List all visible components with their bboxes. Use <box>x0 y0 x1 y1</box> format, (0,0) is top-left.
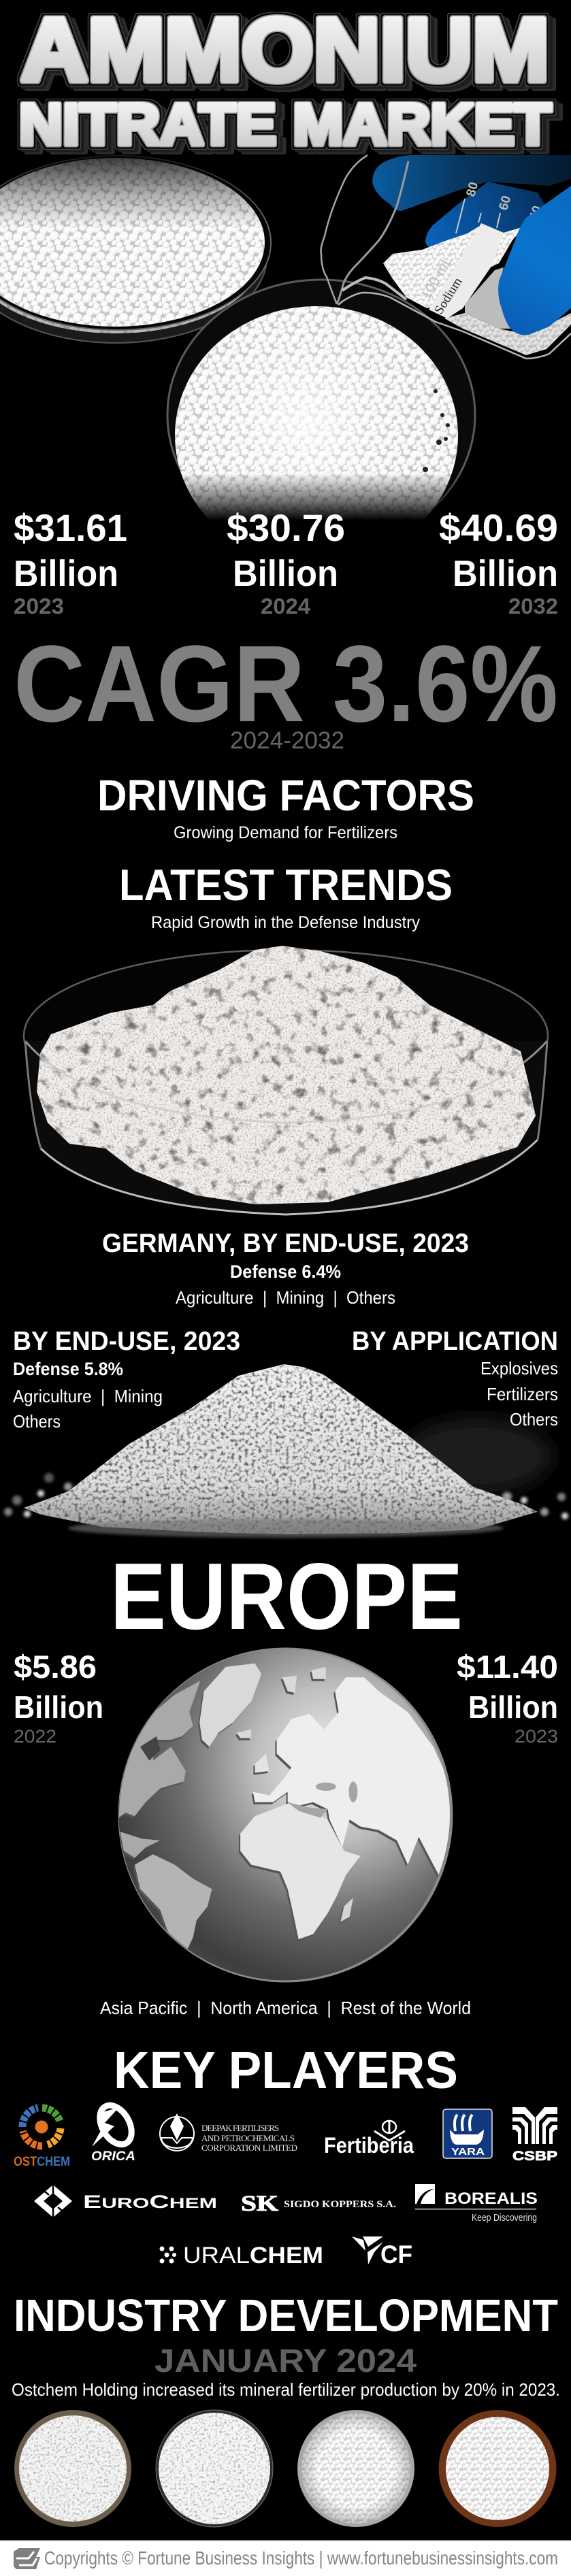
prills at beaker base <box>444 313 571 355</box>
logo: Sigdo Koppers: SIGDO KOPPERS S.A. <box>284 2199 396 2210</box>
by application panel <box>352 1327 558 1430</box>
market size: 2024 <box>227 506 345 618</box>
beaker glass outline <box>321 155 368 304</box>
by application panel: Explosives <box>480 1358 558 1378</box>
logo: EuroChem <box>34 2185 217 2217</box>
market size: 2032: Billion <box>453 553 558 594</box>
logo: Sigdo Koppers <box>241 2192 396 2216</box>
logo: EuroChem: E URO C HEM <box>83 2192 217 2212</box>
Europe value 2023 <box>457 1649 558 1747</box>
beaker label strip <box>429 223 504 318</box>
front glove thumb <box>498 186 571 335</box>
development date: JANUARY 2024 <box>154 2343 417 2379</box>
globe <box>118 1648 455 1983</box>
bowl 4 <box>438 2410 557 2527</box>
region heading: Europe: EUROPE <box>110 1544 463 1649</box>
by application panel: Fertilizers <box>487 1384 558 1404</box>
by application panel: BY APPLICATION <box>352 1327 558 1356</box>
latest trends text: Rapid Growth in the Defense Industry <box>151 913 420 932</box>
Europe value 2023: $11.40 <box>457 1649 558 1685</box>
bowl 2 <box>156 2410 273 2527</box>
beaker with blue glove <box>321 155 571 359</box>
Europe value 2023: 2023 <box>515 1726 558 1747</box>
beaker graduation 40: 40 <box>527 204 545 222</box>
Germany heading: GERMANY, BY END-USE, 2023 <box>102 1229 469 1258</box>
market size: 2024: $30.76 <box>227 506 345 549</box>
dish front rim <box>25 1041 547 1123</box>
Europe value 2022: 2022 <box>14 1726 56 1747</box>
logo: Deepak Fertilisers: AND PETROCHEMICALS <box>201 2133 295 2143</box>
fade to black below dish <box>157 473 490 572</box>
bowls of prills <box>14 2410 557 2527</box>
heading: latest trends: LATEST TRENDS <box>119 860 453 910</box>
beaker graduation 60: 60 <box>497 194 514 212</box>
logo: Fertiberia: Fertiberia <box>324 2133 414 2158</box>
logo: CF: CF <box>380 2241 412 2268</box>
market size: 2023 <box>14 506 127 618</box>
logo: Borealis: Keep Discovering <box>472 2212 537 2224</box>
logo: Fertiberia <box>324 2121 414 2158</box>
logo: Yara: YARA <box>451 2146 485 2158</box>
by end-use panel: Agriculture | Mining <box>13 1386 163 1406</box>
market size: 2032 <box>439 506 558 618</box>
photo: petri dish of white powder <box>24 946 548 1215</box>
beaker graduation 80: 80 <box>464 180 481 198</box>
logo: Borealis: BOREALIS <box>444 2190 538 2208</box>
Europe value 2022: Billion <box>14 1689 103 1725</box>
footer logo <box>14 2548 40 2569</box>
logo: Orica: ORICA <box>91 2149 135 2164</box>
market size: 2023: $31.61 <box>14 506 127 549</box>
upper left petri dish <box>0 154 272 343</box>
background glow <box>402 1419 551 1493</box>
photo: salt-like crystal pile <box>4 1364 568 1538</box>
heading: driving factors: DRIVING FACTORS <box>97 771 474 820</box>
title line 1: AMMONIUM: AMMONIUM <box>21 0 549 99</box>
bowl 3 <box>297 2410 414 2527</box>
logos <box>14 2100 557 2268</box>
other regions list: Asia Pacific | North America | Rest of the World <box>100 1998 471 2018</box>
lower centre petri dish <box>157 280 490 572</box>
logo: Sigdo Koppers: SK <box>241 2192 278 2216</box>
market size: 2032: $40.69 <box>439 506 558 549</box>
by end-use panel: BY END-USE, 2023 <box>13 1327 240 1356</box>
beaker volume text: 100 mL <box>418 253 455 302</box>
logo: Ostchem: OSTCHEM <box>14 2155 70 2169</box>
logo: Ostchem <box>14 2108 70 2169</box>
crystal mound <box>24 1364 538 1534</box>
by end-use panel: Defense 5.8% <box>13 1359 123 1379</box>
scattered crystals <box>4 1473 568 1519</box>
back glove fingers <box>372 155 571 211</box>
logo: Deepak Fertilisers: DEEPAK FERTILISERS <box>201 2123 279 2133</box>
beaker label grey panel <box>465 267 510 329</box>
Europe value 2022: $5.86 <box>14 1649 97 1685</box>
market size: 2024: Billion <box>233 553 338 594</box>
logo: CF <box>352 2236 412 2268</box>
blurred foreground crystals <box>68 1519 504 1538</box>
dish back rim <box>24 950 548 1121</box>
continents <box>118 1664 455 1951</box>
title <box>19 0 551 157</box>
by end-use panel <box>13 1327 240 1432</box>
photo: dishes of ammonium nitrate prills and beaker <box>0 154 571 572</box>
driving factors text: Growing Demand for Fertilizers <box>174 823 397 842</box>
dish base <box>26 1041 546 1215</box>
prills in beaker <box>383 227 524 318</box>
logo: CSBP <box>512 2107 557 2164</box>
title line 2: NITRATE MARKET: NITRATE MARKET <box>19 93 551 157</box>
logo: Orica <box>91 2100 138 2164</box>
bowl 1 <box>14 2410 131 2527</box>
Europe value 2022 <box>14 1649 103 1747</box>
logo: CSBP: CSBP <box>512 2149 557 2164</box>
by end-use panel: Others <box>13 1411 61 1432</box>
by application panel: Others <box>510 1409 558 1430</box>
beaker label text: Sodium <box>431 275 466 317</box>
market size: 2023: 2023 <box>14 594 64 618</box>
market size: 2032: 2032 <box>508 594 558 618</box>
market size: 2023: Billion <box>14 553 118 594</box>
dark gaps among prills <box>423 389 450 472</box>
footer <box>0 2540 571 2576</box>
CAGR period: 2024-2032 <box>230 727 344 754</box>
inland seas <box>288 1781 357 1818</box>
powder mound <box>37 946 536 1204</box>
logo: Borealis <box>415 2184 538 2224</box>
Hudson Bay <box>140 1736 160 1761</box>
Europe value 2023: Billion <box>468 1689 558 1725</box>
logo: Uralchem: URALCHEM <box>183 2243 323 2268</box>
logo: Yara <box>443 2109 492 2158</box>
heading: key players: KEY PLAYERS <box>114 2041 458 2100</box>
Germany defense share: Defense 6.4% <box>230 1261 341 1282</box>
market size: 2024: 2024 <box>261 594 310 618</box>
logo: Deepak Fertilisers: CORPORATION LIMITED <box>201 2143 297 2153</box>
Germany segments: Agriculture | Mining | Others <box>176 1287 395 1308</box>
logo: Deepak Fertilisers <box>160 2113 297 2153</box>
